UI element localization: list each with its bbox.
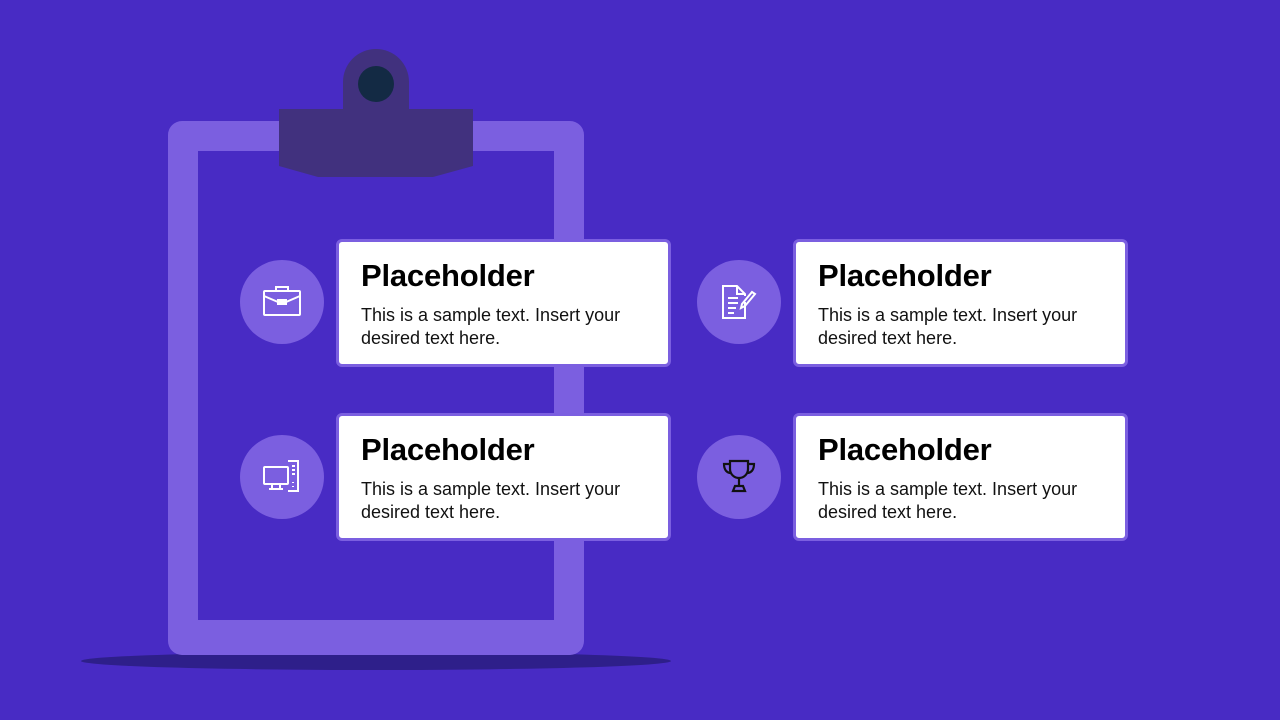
card 1 [336, 239, 671, 367]
icon circle: briefcase [240, 260, 324, 344]
icon circle: document with pen [697, 260, 781, 344]
card 2 [793, 239, 1128, 367]
shadow [81, 652, 671, 670]
card 3 [336, 413, 671, 541]
card 1: Placeholder [361, 258, 535, 293]
card 3: Placeholder [361, 432, 535, 467]
clipboard frame [168, 121, 584, 655]
card 2: This is a sample text. Insert your desired text here. [818, 305, 1077, 348]
card 3: This is a sample text. Insert your desired text here. [361, 479, 620, 522]
icon circle: computer [240, 435, 324, 519]
clip [279, 49, 473, 177]
card 1: This is a sample text. Insert your desired text here. [361, 305, 620, 348]
card 4 [793, 413, 1128, 541]
card 4: This is a sample text. Insert your desired text here. [818, 479, 1077, 522]
card 4: Placeholder [818, 432, 992, 467]
icon circle: trophy [697, 435, 781, 519]
card 2: Placeholder [818, 258, 992, 293]
